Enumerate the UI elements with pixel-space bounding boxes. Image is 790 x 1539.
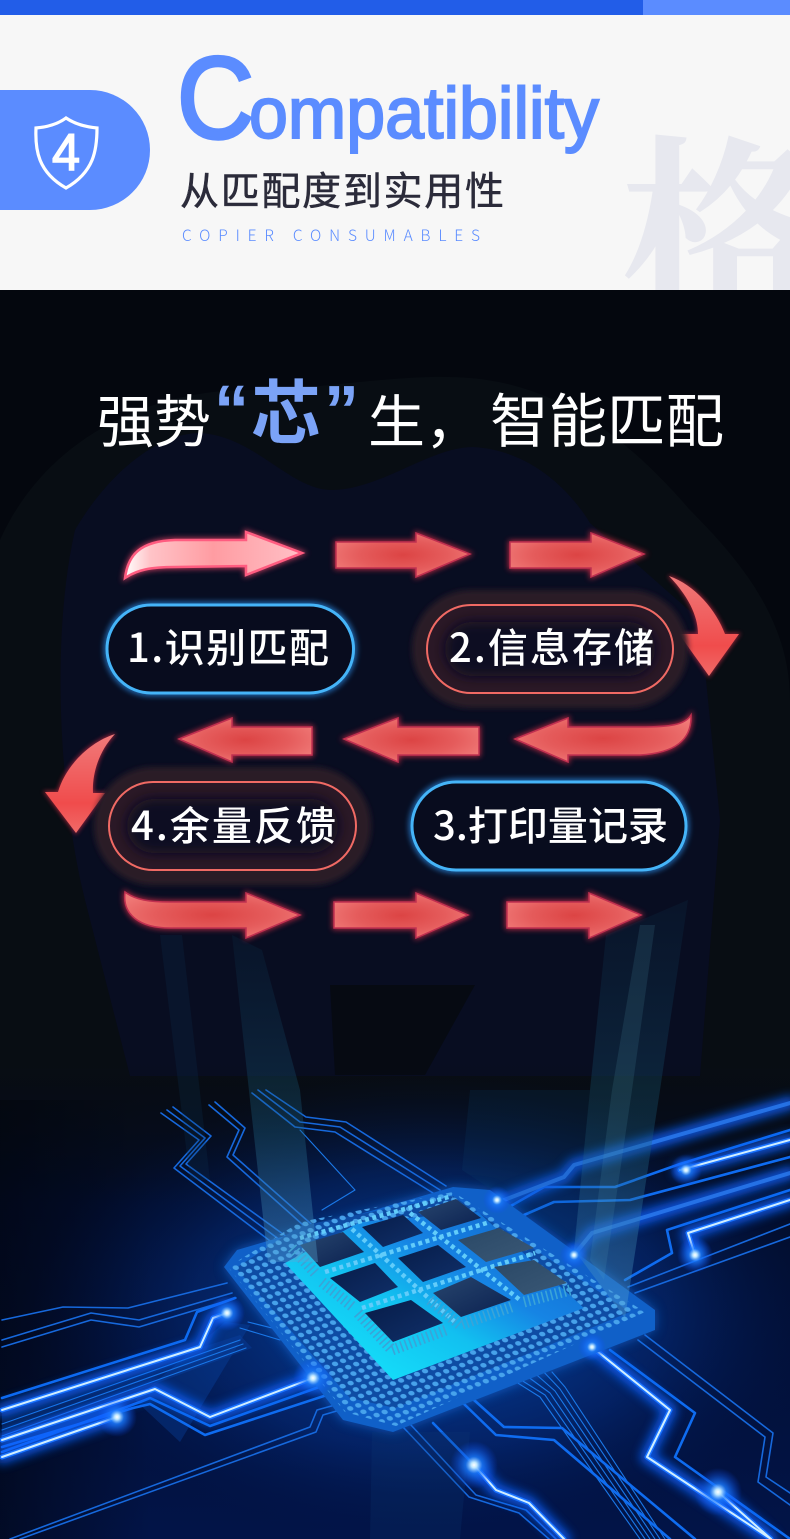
inner dark area [236,1196,630,1408]
wire band [2,1130,665,1539]
arrow 5 [344,718,479,762]
chip halo [224,1187,655,1432]
light beams [160,900,688,1539]
highlighted word: “ [214,371,249,449]
highlighted word: ” [324,371,359,449]
highlighted word [214,371,359,453]
title: C [177,33,254,163]
header panel [0,0,790,290]
die grid lines [300,1196,535,1322]
section heading: 生， [368,391,482,455]
cyan die [285,1212,584,1380]
top bar [0,0,790,15]
arrow 4 [515,715,691,762]
arrow 2 [336,533,470,577]
step 2 pill: 2.信息存储 [449,616,654,674]
highlighted word: 芯 [251,375,321,453]
arrow 9 [507,893,641,938]
translucent wedge [135,1322,250,1442]
bright core traces [2,1140,790,1539]
arrow: turn down left [45,734,115,833]
arrow: turn down right [669,576,739,676]
solder dots [228,1192,645,1426]
glow under bright traces [2,1103,790,1539]
step 1 pill: 1.识别匹配 [127,616,329,674]
title [177,33,599,163]
step 3 pill: 3.打印量记录 [433,794,668,852]
english caption: COPIER CONSUMABLES [182,224,480,246]
substrate [224,1187,655,1432]
flow row 3 arrows [125,892,641,938]
number badge [0,90,150,210]
arrow 6 [179,718,312,762]
arrow 3 [510,533,644,577]
mid traces [2,1130,790,1539]
soft top right rays [504,1103,790,1255]
microchip [224,1187,655,1432]
step 2 pill [412,590,688,708]
step 4 pill: 4.余量反馈 [131,794,336,852]
section heading [97,371,724,455]
step 3 pill [412,782,686,870]
subtitle: 从匹配度到实用性 [180,171,504,214]
trace nodes [97,1154,742,1516]
blue band traces [2,1140,790,1539]
arrow 1 highlighted [125,532,302,578]
step 1 pill [107,605,354,693]
title: ompatibility [249,74,599,154]
section heading: 智能匹配 [490,390,724,455]
thin dim traces [2,1090,790,1539]
badge number: 4 [52,124,80,182]
circuit traces [2,1090,790,1539]
section heading: 强势 [97,391,211,455]
icon: shield [36,118,97,188]
chip squares [300,1199,567,1342]
arrow 8 [334,893,468,938]
bond wire fringes [292,1248,570,1350]
flow row 2 arrows [179,715,691,762]
flow row 1 arrows [125,532,644,578]
step 4 pill [94,767,371,885]
arrow 7 [125,892,300,938]
